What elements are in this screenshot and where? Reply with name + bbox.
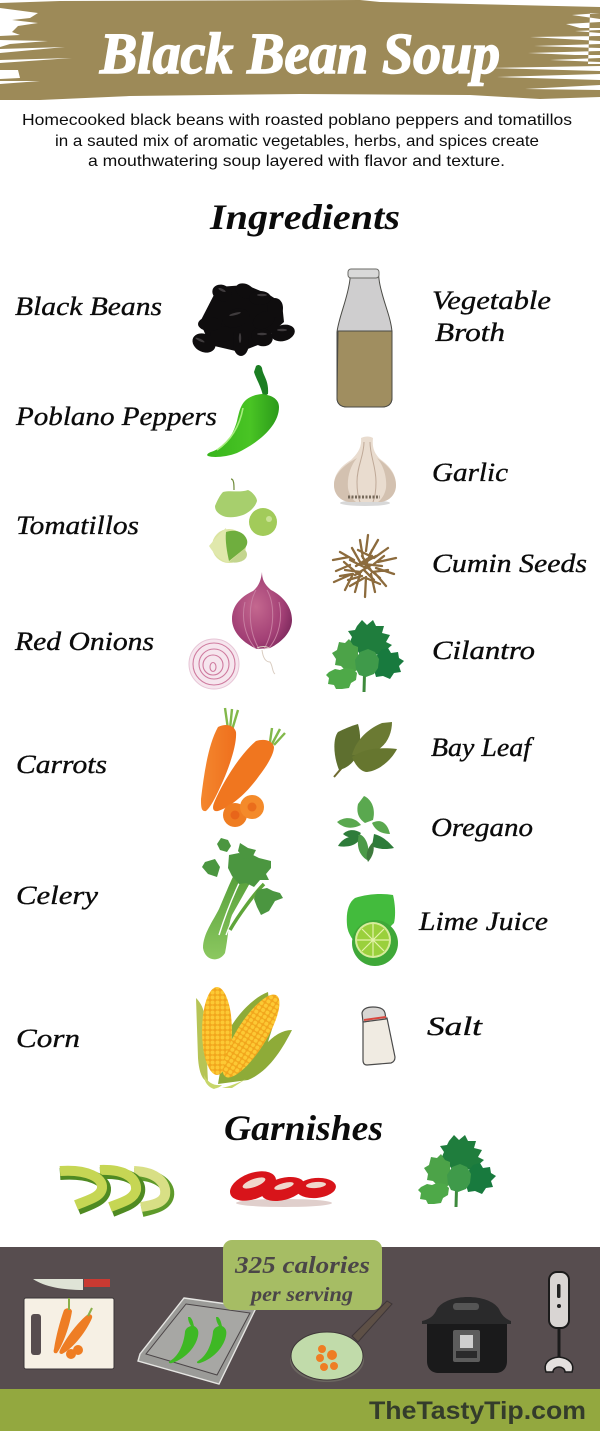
intro text: a mouthwatering soup layered with flavor and texture. <box>88 153 505 170</box>
calories callout <box>223 1240 382 1310</box>
intro text: in a sauted mix of aromatic vegetables, herbs, and spices create <box>55 133 539 150</box>
icon: frying pan with carrots <box>290 1301 392 1382</box>
right labels: Broth <box>435 318 505 347</box>
left labels: Corn <box>16 1024 80 1053</box>
right labels: Garlic <box>432 458 509 487</box>
left labels: Black Beans <box>15 292 162 321</box>
footer bar <box>0 1389 600 1431</box>
icon: black beans <box>189 280 297 356</box>
icon: tomatillos <box>209 479 277 563</box>
left labels: Celery <box>16 881 99 910</box>
calories callout: per serving <box>249 1284 353 1306</box>
icon: corn <box>196 987 292 1089</box>
icon: pressure cooker <box>422 1297 511 1373</box>
icon: cutting board with carrots <box>24 1298 114 1369</box>
heading: Ingredients: Ingredients <box>209 197 400 237</box>
icon: bottle of broth <box>337 269 392 407</box>
garnish: avocado slices <box>60 1170 168 1211</box>
icon: carrots <box>201 708 285 827</box>
right labels: Salt <box>427 1012 483 1041</box>
icon: salt shaker <box>362 1007 395 1065</box>
right labels: Cumin Seeds <box>432 549 587 578</box>
icon: red onion <box>189 572 292 689</box>
icon: immersion blender <box>545 1272 573 1372</box>
garnish: red pepper slices <box>226 1166 337 1207</box>
icon: oregano <box>337 796 394 862</box>
right labels: Oregano <box>431 813 533 842</box>
icon: poblano pepper <box>207 365 279 457</box>
icon: celery <box>202 838 283 959</box>
calories callout: 325 calories <box>234 1253 370 1279</box>
icon: bay leaves <box>334 722 397 777</box>
icon: knife <box>33 1279 110 1290</box>
left labels <box>14 292 217 1053</box>
right labels <box>418 286 587 1041</box>
left labels: Poblano Peppers <box>15 402 217 431</box>
header banner: brush stroke <box>0 0 600 100</box>
icon: baking tray with peppers <box>138 1298 256 1384</box>
heading: Garnishes: Garnishes <box>224 1108 383 1148</box>
icon: cumin seeds <box>333 535 396 597</box>
icon: cilantro <box>326 620 404 692</box>
left labels: Red Onions <box>14 627 154 656</box>
intro text <box>22 112 572 170</box>
title: Black Bean Soup <box>99 21 500 86</box>
right labels: Lime Juice <box>418 907 548 936</box>
intro text: Homecooked black beans with roasted poblano peppers and tomatillos <box>22 112 572 129</box>
right labels: Cilantro <box>432 636 535 665</box>
icon: garlic <box>334 436 396 506</box>
garnish: cilantro <box>418 1135 496 1207</box>
left labels: Carrots <box>16 750 107 779</box>
right labels: Bay Leaf <box>431 733 535 762</box>
left labels: Tomatillos <box>16 511 139 540</box>
icon: lime <box>347 894 398 966</box>
footer panel <box>0 1247 600 1389</box>
right labels: Vegetable <box>432 286 551 315</box>
website credit: TheTastyTip.com <box>369 1397 586 1425</box>
